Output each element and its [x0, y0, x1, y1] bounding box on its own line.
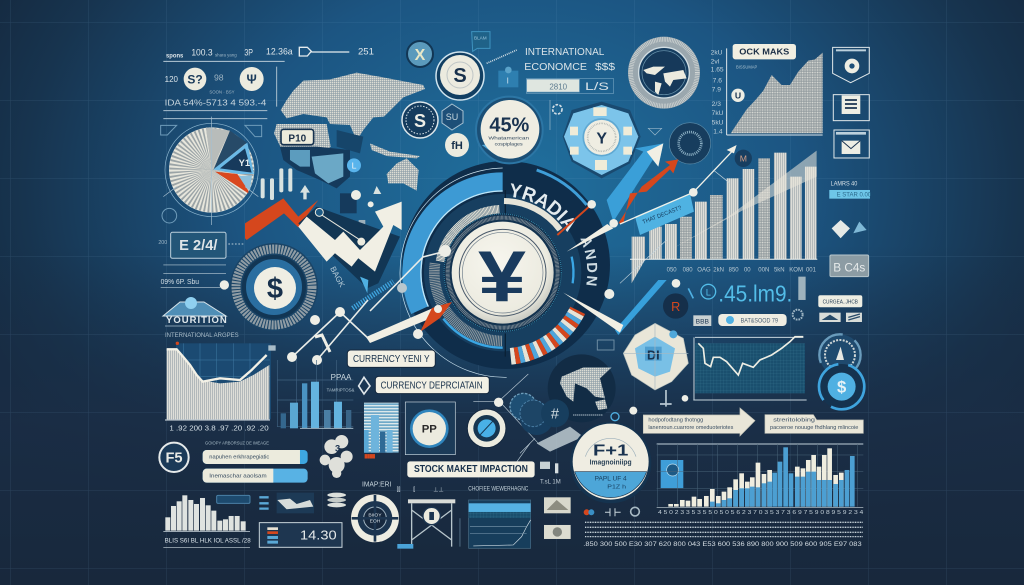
- label: stock market: [407, 461, 535, 477]
- panel: lower-left charts: [159, 342, 553, 549]
- cycle icon: IMAP:ERI: [362, 480, 391, 489]
- icon row: IDA 54%-5713 4 593.-4: [165, 97, 267, 107]
- stock area chart: OCK MAKS: [739, 47, 790, 57]
- label: currency depreciation: CURRENCY DEPRCIATAIN: [381, 381, 483, 392]
- label P10: [281, 129, 314, 145]
- icon row: SOON · BSY: [209, 89, 235, 94]
- pills row: BAT&SOOD 79: [741, 318, 779, 324]
- pills row: [693, 310, 803, 326]
- stock area chart: 7kU: [712, 110, 724, 117]
- side icons: [833, 47, 869, 158]
- growth bar chart: 050: [667, 267, 677, 273]
- growth bar chart: 5kN: [774, 267, 785, 273]
- growth bar chart: 00: [744, 267, 751, 273]
- small markers: [597, 340, 688, 421]
- small chat tag and lock: [472, 32, 518, 87]
- F+1 badge: [570, 422, 651, 503]
- sliders: Inemaschar aaolsam: [209, 473, 267, 479]
- box label: [158, 232, 243, 273]
- panel: lower-right charts: [520, 279, 864, 548]
- blue bar chart: PPAA: [331, 373, 352, 382]
- hex yen badge: Y: [596, 130, 607, 147]
- growth bar chart: 2kN: [713, 267, 724, 273]
- cycle icon: [351, 480, 399, 542]
- target icon: [467, 374, 538, 467]
- stock area chart: [711, 44, 823, 135]
- growth bar chart: [630, 151, 817, 283]
- data header row: 100.3: [191, 47, 213, 57]
- data header row: 3P: [244, 47, 253, 57]
- gate icon: ⫿⫿: [397, 486, 401, 493]
- big value: .45.lm9.: [718, 280, 792, 306]
- wave chart: [460, 487, 531, 548]
- label: currency yen: CURRENCY YENI Y: [353, 354, 430, 365]
- title: ECONOMCE: [524, 62, 587, 73]
- mini bar card: ████: [365, 453, 375, 459]
- box label: E 2/4/: [179, 238, 217, 254]
- gears cluster: [510, 393, 553, 435]
- right side stats: [829, 180, 872, 277]
- bubble 45%: cospiplages: [495, 141, 523, 146]
- flow box 2: pacoeroe nouuge fhdhlang mlincoie: [770, 425, 858, 431]
- globe coin: [628, 37, 700, 109]
- red dial: [663, 288, 693, 319]
- white arrow with cyan band: [563, 279, 680, 335]
- bubble 45%: 45%: [489, 114, 529, 137]
- gate icon: [397, 486, 455, 549]
- trapezoid icon and subtitle: [163, 297, 239, 339]
- note row: [161, 277, 229, 290]
- gate icon: ⊥⊥: [433, 486, 444, 493]
- cyan ribbon: THAT DECAST?: [642, 205, 683, 226]
- shield icon: [833, 47, 869, 83]
- line over bars chart: [165, 342, 276, 433]
- icon row: 120: [165, 75, 179, 84]
- stock area chart: 2kU: [711, 50, 723, 57]
- mini bar card: [364, 403, 399, 459]
- title bar: L/S: [585, 81, 609, 93]
- data header row: spons: [166, 52, 184, 59]
- gears at lower left: #: [551, 407, 560, 423]
- title: INTERNATIONAL: [525, 47, 605, 58]
- connected trend lines: [287, 245, 452, 365]
- blue label badge: [661, 460, 683, 488]
- stock area chart: BISSUMAP: [736, 65, 757, 70]
- growth bar chart: OAG: [697, 267, 711, 273]
- panel: top-right charts: [472, 32, 872, 307]
- coin stack icon: 3: [335, 444, 340, 454]
- small tags around pie: [161, 125, 262, 223]
- zigzag white arrow: [298, 202, 402, 308]
- seal icon F5: [159, 443, 189, 472]
- trapezoid icon and subtitle: INTERNATIONAL ARGPES: [165, 333, 239, 339]
- growth bar chart: 00N: [758, 267, 769, 273]
- small icons row: [217, 493, 346, 513]
- label: currency yen: [347, 350, 435, 367]
- stacked bar chart: 4 5 0 2 3 3 5 3 5 5 0 5 0 5 6 2 3 7 0 3 5 3 7 3 6 9 7 5 9 0 8 9 5 9 2 3 4: [658, 510, 863, 516]
- flow box 2: streritolobing: [773, 417, 815, 423]
- flow arrow 1: [643, 408, 755, 436]
- wave chart: CHOFIEE WEWERHAGNC: [468, 487, 529, 493]
- dollar dial: $: [267, 273, 283, 305]
- data header row: [163, 47, 374, 61]
- big value: [701, 277, 806, 306]
- label: currency depreciation: [359, 376, 489, 394]
- rising arrows: [557, 143, 752, 283]
- yen symbol: ¥: [478, 238, 526, 318]
- icon: hexagon tag: SU: [446, 112, 458, 122]
- cyan ribbon: [635, 193, 694, 235]
- growth bar chart: 850: [729, 267, 739, 273]
- bottom bars: BLIS S6I BL HLK IOL ASSL /28: [165, 538, 251, 545]
- cream tag: [818, 295, 862, 307]
- title bar: 2810: [549, 82, 568, 91]
- bubble 45%: [476, 97, 543, 163]
- center yen dial: YRADIA: [510, 183, 576, 232]
- sliders: GOIOPY ARBORSUZ DE IMEAGE: [205, 441, 270, 447]
- stock area chart: 7.9: [712, 86, 721, 93]
- rising arrows: M: [740, 154, 747, 164]
- line chart with grid: [693, 337, 807, 400]
- dollar dial: [230, 243, 318, 331]
- pie chart: Y1: [239, 158, 250, 168]
- stock area chart: U: [735, 91, 741, 101]
- stacked bar chart: [657, 444, 863, 516]
- hex yen badge: [563, 102, 641, 178]
- flow box 2: [765, 415, 863, 433]
- F+1 badge: Imagnoiniipg: [590, 459, 632, 466]
- zigzag red arrow: [245, 198, 318, 240]
- right side stats: LAMRS 40: [831, 180, 858, 187]
- icon: X coin: X: [415, 47, 426, 64]
- icon row: 98: [214, 73, 224, 83]
- box label: 200: [158, 240, 167, 246]
- bottom bars: [163, 495, 251, 547]
- dark globe: [548, 354, 616, 422]
- cream label tag thumbnails: [819, 313, 862, 322]
- seal card: [405, 402, 455, 455]
- data header row: 251: [358, 47, 374, 57]
- cycle icon: BIIOY: [368, 513, 382, 519]
- coin stack icon: [320, 435, 353, 478]
- small chat tag and lock: BLAM: [474, 35, 487, 40]
- growth bar chart: 080: [683, 267, 693, 273]
- shields: L: [352, 161, 357, 171]
- sliders: [203, 441, 308, 483]
- stock area chart: 1.4: [713, 128, 723, 135]
- ticker lines and numbers: .850 300 500 E30 307 620 800 043 E53 600 536 890 800 900 509 600 905 E97 083: [583, 541, 862, 548]
- small pills and dots: [261, 168, 381, 231]
- title: [524, 47, 615, 73]
- seal card: PP: [422, 424, 437, 436]
- right side stats: E STAR 0.00: [837, 193, 872, 199]
- data header row: 12.36a: [266, 47, 293, 57]
- stock area chart: 2/3: [712, 101, 721, 108]
- center yen dial: [400, 162, 610, 378]
- F+1 badge: P1Z h: [607, 484, 626, 490]
- cycle icon: EOH: [370, 519, 381, 525]
- blue bar chart: [277, 360, 354, 428]
- line over bars chart: 1 .92 200 3.8 .97 .20 .92 .20: [169, 424, 269, 433]
- zigzag white arrow: BAGK: [328, 265, 347, 289]
- envelope icon: [834, 130, 869, 158]
- stock area chart: 1.65: [711, 67, 724, 74]
- icon row: [163, 67, 277, 119]
- flow arrow 1: lanenroun.cuarrore omeduoteriotes: [648, 425, 733, 431]
- bubble 45%: Whatamerican: [488, 135, 529, 141]
- icon: dollar coin top: S: [453, 65, 467, 87]
- gate icon: ⫿: [413, 486, 415, 493]
- hexagon DI: DI: [647, 348, 660, 362]
- F+1 badge: PAPL UF 4: [595, 476, 627, 483]
- growth bar chart: 001: [806, 267, 817, 273]
- label: stock market: STOCK MAKET IMPACTION: [414, 464, 528, 475]
- dark backing of zigzag: [298, 207, 400, 288]
- sliders: napuhen erkhrapegiatic: [209, 455, 269, 461]
- shields: [280, 147, 361, 188]
- pills row: BBB: [696, 318, 710, 325]
- dial pair: [819, 334, 864, 409]
- gears at lower left: [520, 399, 583, 453]
- F+1 badge: F+1: [593, 442, 629, 459]
- stock area chart: 5kU: [712, 120, 724, 127]
- title bar: [527, 78, 613, 94]
- small thumbnails: [540, 462, 571, 539]
- small legend icons: [584, 507, 639, 516]
- value box 14.30: 14.30: [300, 528, 337, 542]
- ticker lines and numbers: [583, 522, 863, 548]
- dial pair: $: [837, 378, 847, 397]
- right side stats: B C4s: [833, 261, 865, 275]
- cream tag: CURGEA..JHCB: [823, 299, 858, 305]
- stock area chart: 7.6: [713, 78, 722, 85]
- icon: seal: S: [414, 111, 426, 131]
- value box 14.30: [259, 523, 342, 547]
- small chat tag and lock: I: [507, 76, 509, 85]
- icon: cream coin: fH: [451, 140, 463, 152]
- document icon: [833, 95, 869, 121]
- stock area chart: 2vl: [711, 58, 720, 65]
- small thumbnails: T.sL 1M: [540, 479, 561, 485]
- pie chart: [163, 117, 258, 225]
- red dial: R: [671, 300, 680, 314]
- icon row: Ψ: [247, 73, 257, 87]
- small top icons near yen dial: [402, 41, 484, 157]
- seal icon F5: F5: [165, 451, 183, 467]
- panel: top-left data and pie: [158, 47, 425, 308]
- flow arrow 1: hodpofodtang thotngg: [648, 418, 703, 424]
- stamp dial: [550, 100, 711, 164]
- data header row: shara yang: [215, 53, 237, 58]
- label P10: P10: [288, 133, 307, 144]
- center yen dial: ANDN: [580, 238, 598, 286]
- trapezoid icon and subtitle: YOURITION: [166, 315, 228, 326]
- hexagon DI: [623, 323, 688, 390]
- note row: 09% 6P. Sbu: [161, 277, 199, 286]
- growth bar chart: KOM: [789, 267, 803, 273]
- big value: L: [706, 287, 711, 297]
- title: $$$: [595, 62, 615, 73]
- icon row: S?: [187, 72, 203, 86]
- world map: [274, 73, 425, 191]
- blue bar chart: TAMRIPTOS&: [327, 388, 354, 393]
